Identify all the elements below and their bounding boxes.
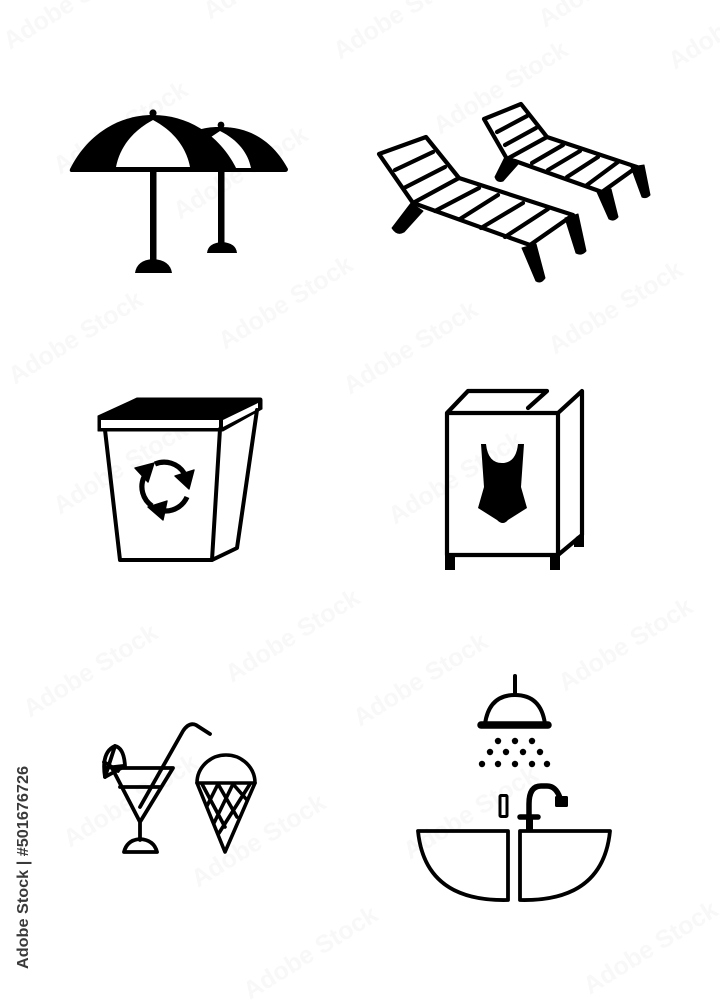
watermark pattern: Adobe Stock: [58, 748, 203, 853]
watermark pattern: Adobe Stock: [48, 75, 193, 180]
tap handle: [500, 796, 507, 816]
basin left: [418, 831, 508, 900]
bin body: [105, 410, 257, 560]
icon: recycling bin: [98, 398, 262, 560]
front umbrella: [70, 109, 238, 273]
cabin feet: [445, 532, 584, 570]
watermark pattern: Adobe Stock: [543, 255, 688, 360]
icon: washbasin: [418, 786, 610, 900]
watermark pattern: Adobe Stock: [168, 120, 313, 225]
watermark pattern: Adobe Stock: [3, 285, 148, 390]
watermark pattern: Adobe Stock: [18, 618, 163, 723]
icon: sun loungers: [379, 104, 650, 282]
glass base: [124, 839, 157, 852]
watermark pattern: Adobe Stock: [338, 295, 483, 400]
watermark pattern: Adobe Stock: [398, 760, 543, 865]
icon: cocktail: [104, 724, 210, 852]
shower head: [481, 676, 548, 725]
scoop: [197, 755, 255, 783]
water drops: [479, 738, 550, 767]
cone and lattice: [197, 783, 255, 852]
recycling symbol: [135, 462, 194, 520]
rear lounger: [484, 104, 650, 220]
swimsuit: [478, 444, 527, 523]
straw: [140, 724, 210, 807]
watermark pattern: Adobe Stock: [48, 415, 193, 520]
watermark pattern: Adobe Stock: [186, 788, 331, 893]
icon: beach umbrellas: [70, 109, 288, 273]
rear umbrella: [198, 122, 288, 253]
stock image id caption: Adobe Stock | #501676726: [15, 766, 32, 969]
watermark pattern: Adobe Stock: [220, 583, 365, 688]
watermark pattern: Adobe Stock: [348, 627, 493, 732]
cabin outline: [447, 391, 582, 555]
glass: [112, 768, 173, 840]
front lounger: [379, 137, 586, 282]
lime slice: [104, 746, 125, 777]
watermark pattern: Adobe Stock: [213, 250, 358, 355]
watermark pattern: Adobe Stock: [383, 425, 528, 530]
bin lid: [98, 398, 262, 431]
icon: changing cabin: [445, 391, 584, 570]
icon: shower: [479, 676, 550, 767]
icon: ice cream cone: [197, 755, 255, 852]
watermark pattern: Adobe Stock: [428, 35, 573, 140]
watermark pattern: Adobe Stock: [553, 592, 698, 697]
faucet: [520, 786, 568, 831]
basin right: [520, 831, 610, 900]
watermark pattern: Adobe Stock: [578, 895, 720, 1000]
